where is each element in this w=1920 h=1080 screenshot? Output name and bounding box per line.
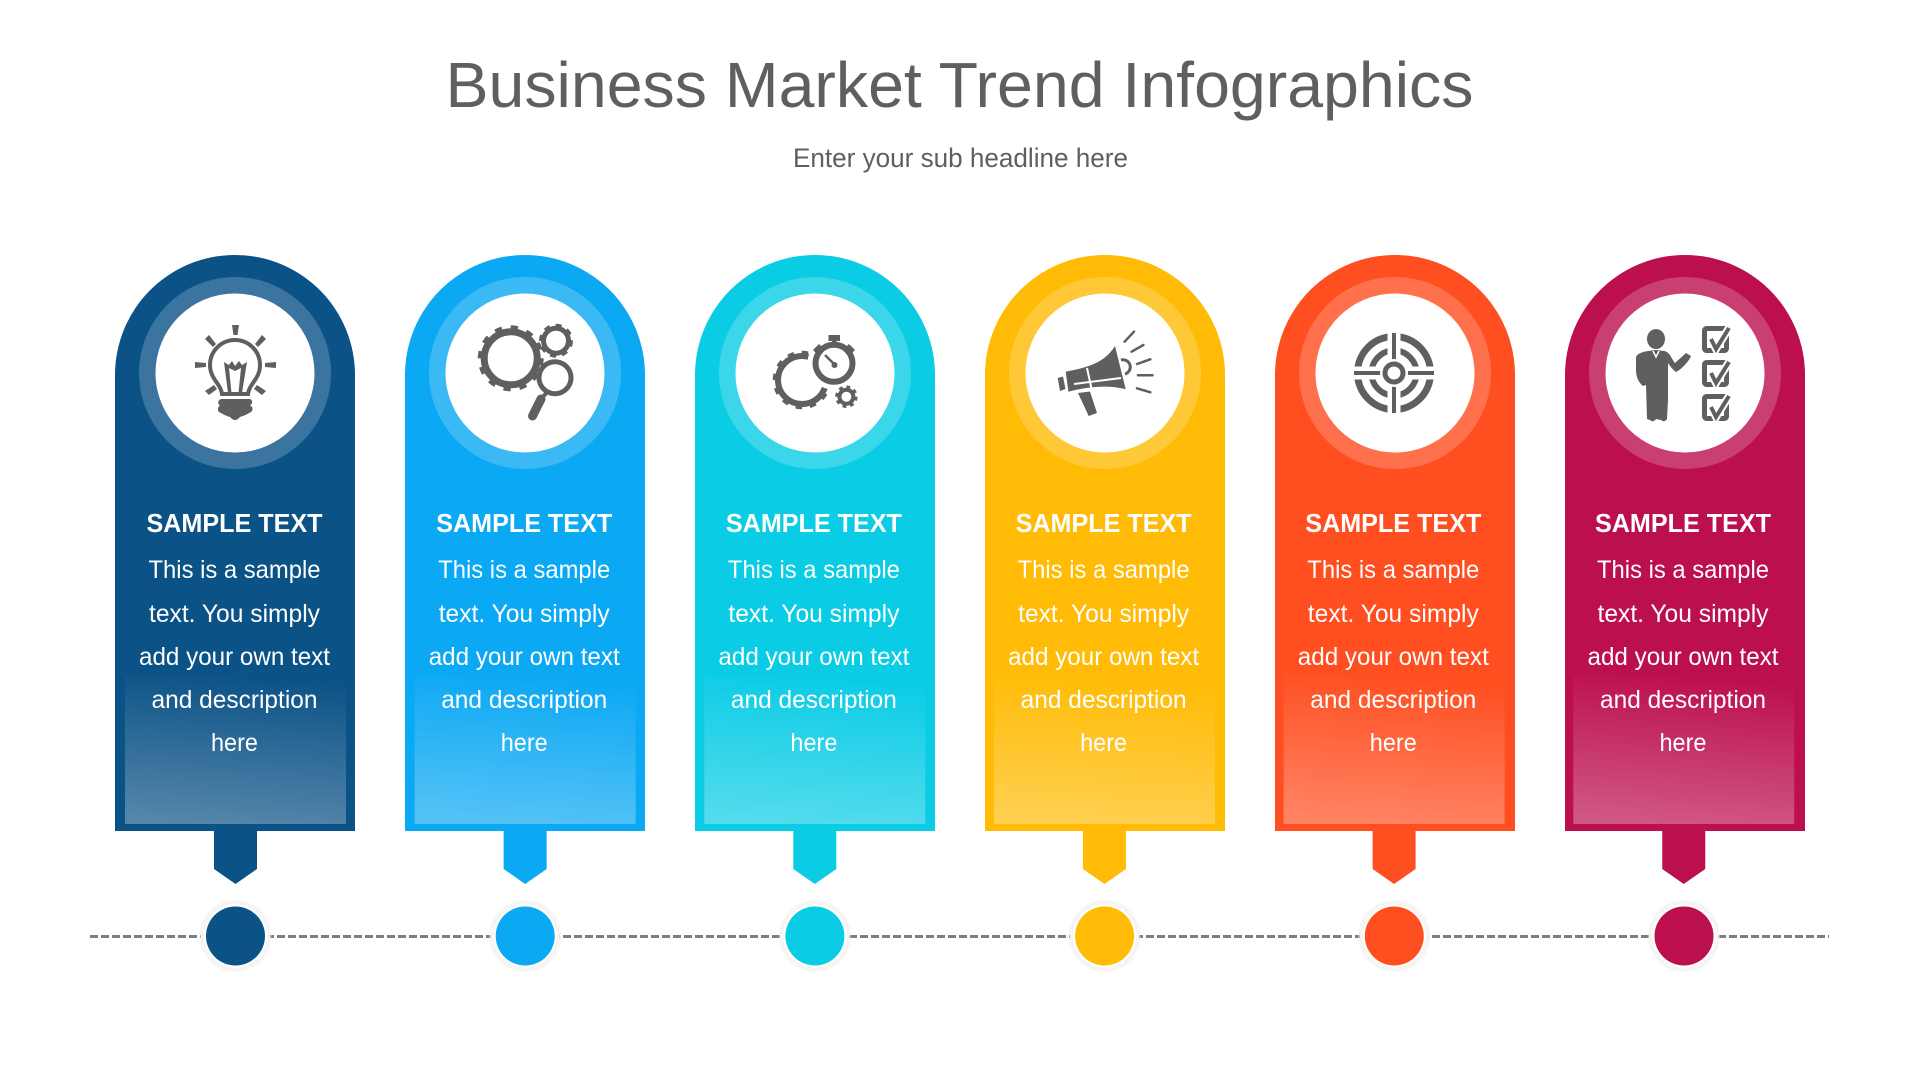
icon disc — [1316, 294, 1474, 452]
description — [429, 556, 620, 757]
pointer — [1662, 830, 1705, 884]
icon: light bulb — [195, 325, 276, 420]
pointer — [214, 830, 257, 884]
timeline marker — [489, 900, 561, 972]
description: text. You simply — [439, 600, 610, 628]
description: add your own text — [1008, 643, 1199, 671]
icon: target — [1351, 330, 1437, 416]
description: This is a sample — [1307, 556, 1479, 584]
bottom gradient — [1573, 675, 1794, 824]
description: This is a sample — [1018, 556, 1190, 584]
description: here — [1080, 729, 1127, 757]
icon: person with checklist — [1636, 328, 1729, 421]
card body — [405, 255, 645, 831]
description: add your own text — [1298, 643, 1489, 671]
heading: SAMPLE TEXT — [726, 508, 902, 538]
description: text. You simply — [728, 600, 900, 628]
pointer — [504, 830, 547, 884]
description: here — [1660, 729, 1706, 757]
description: This is a sample — [1597, 556, 1769, 584]
bottom gradient — [1284, 675, 1505, 824]
timeline marker — [1358, 900, 1430, 972]
description — [1298, 556, 1489, 757]
icon ring — [1009, 277, 1201, 469]
heading: SAMPLE TEXT — [1016, 508, 1192, 538]
card body — [985, 255, 1225, 831]
card body — [1275, 255, 1515, 831]
description: and description — [152, 686, 318, 714]
icon ring — [429, 277, 621, 469]
description: here — [1370, 729, 1417, 757]
timeline marker — [1648, 900, 1720, 972]
bottom gradient — [704, 675, 925, 824]
description: text. You simply — [1598, 600, 1769, 628]
heading: SAMPLE TEXT — [146, 508, 323, 538]
timeline marker — [1069, 900, 1141, 972]
description: here — [501, 729, 548, 757]
pointer — [793, 830, 836, 884]
description — [1008, 556, 1199, 757]
timeline marker — [200, 900, 272, 972]
description: This is a sample — [728, 556, 900, 584]
heading: SAMPLE TEXT — [436, 508, 612, 538]
icon ring — [139, 277, 331, 469]
panel: card 4 megaphone — [985, 255, 1225, 972]
heading: SAMPLE TEXT — [1305, 508, 1481, 538]
panel: card 2 gears and magnifier — [405, 255, 645, 972]
card body — [695, 255, 935, 831]
bottom gradient — [125, 675, 346, 824]
icon: megaphone — [1058, 332, 1152, 416]
description: This is a sample — [148, 556, 320, 584]
icon disc — [1026, 294, 1184, 452]
description: add your own text — [139, 643, 330, 671]
icon ring — [719, 277, 911, 469]
panel: card 3 gears and stopwatch — [695, 255, 935, 972]
description: and description — [1021, 686, 1187, 714]
description: text. You simply — [1308, 600, 1479, 628]
description: here — [211, 729, 258, 757]
description — [139, 556, 330, 757]
description: add your own text — [718, 643, 909, 671]
title: Business Market Trend Infographics — [446, 49, 1474, 121]
description: text. You simply — [149, 600, 320, 628]
description: This is a sample — [438, 556, 610, 584]
icon: gears and magnifier — [480, 326, 571, 416]
icon disc — [446, 294, 604, 452]
description: and description — [441, 686, 607, 714]
card body — [1565, 255, 1805, 831]
icon: gears and stopwatch — [775, 335, 860, 407]
panel: card 5 target — [1275, 255, 1515, 972]
heading: SAMPLE TEXT — [1595, 508, 1771, 538]
icon disc — [1606, 294, 1764, 452]
description: text. You simply — [1018, 600, 1190, 628]
icon ring — [1299, 277, 1491, 469]
icon disc — [156, 294, 314, 452]
description: add your own text — [429, 643, 620, 671]
bottom gradient — [415, 675, 636, 824]
panel: card 6 person with checklist — [1565, 255, 1805, 972]
icon disc — [736, 294, 894, 452]
pointer — [1083, 830, 1126, 884]
card body — [115, 255, 355, 831]
icon ring — [1589, 277, 1781, 469]
description: here — [790, 729, 837, 757]
subtitle: Enter your sub headline here — [793, 143, 1128, 173]
timeline marker — [779, 900, 851, 972]
pointer — [1373, 830, 1416, 884]
timeline dashed line — [90, 935, 1829, 938]
description: and description — [1600, 686, 1766, 714]
description — [1588, 556, 1779, 757]
description: and description — [731, 686, 897, 714]
description: and description — [1310, 686, 1476, 714]
bottom gradient — [994, 675, 1215, 824]
panel: card 1 light bulb — [115, 255, 355, 972]
description: add your own text — [1588, 643, 1779, 671]
description — [718, 556, 909, 757]
